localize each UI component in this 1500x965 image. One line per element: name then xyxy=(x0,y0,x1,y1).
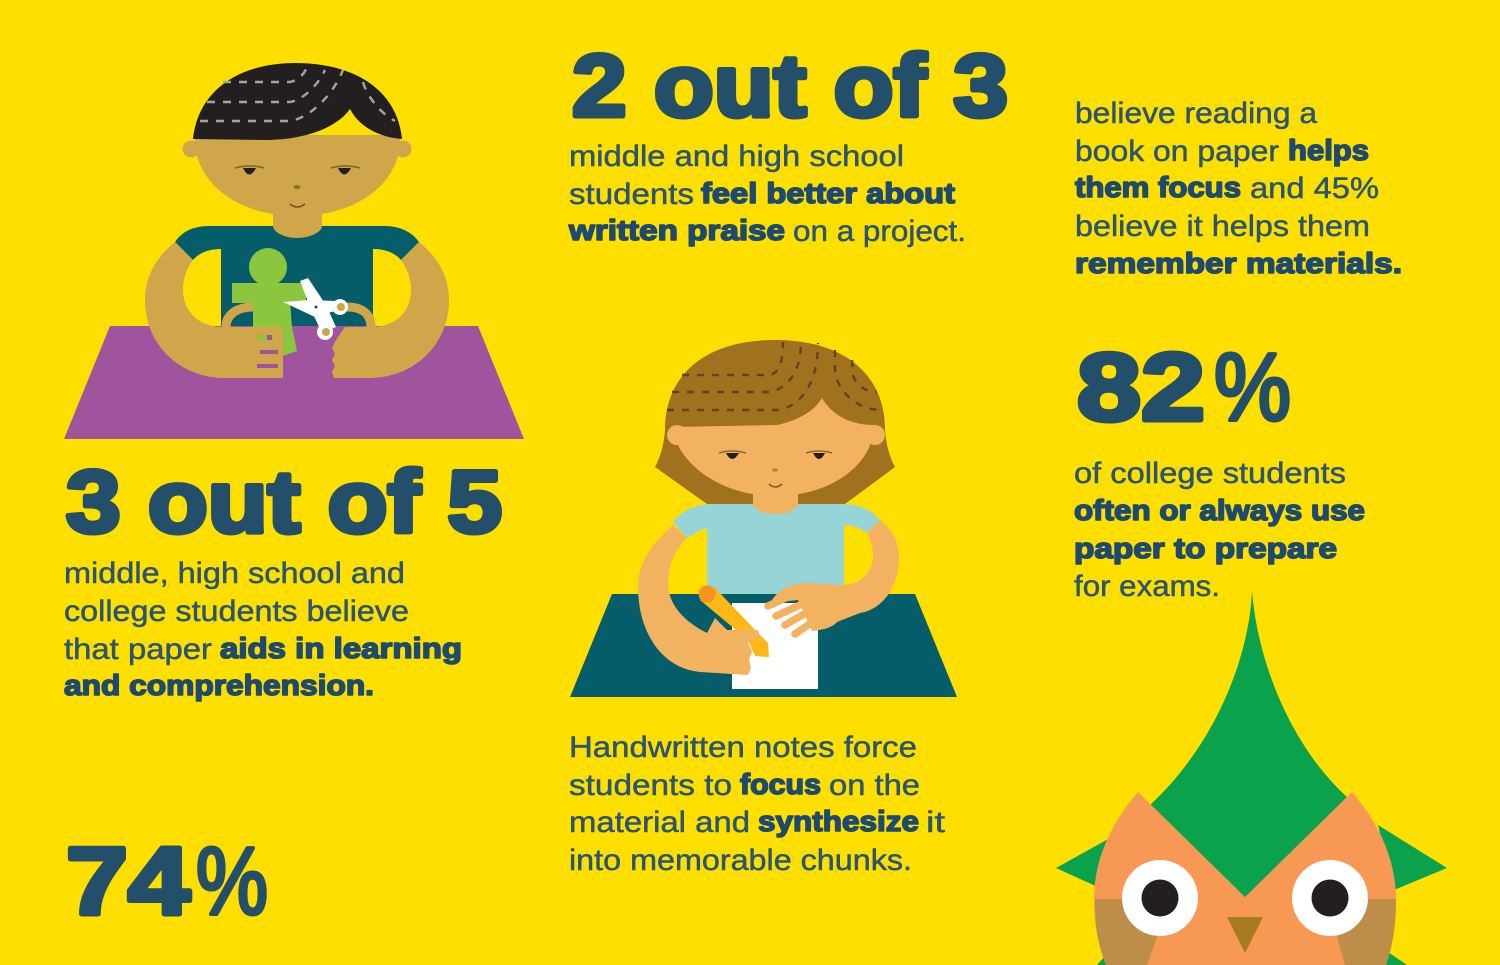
illustration: boy cutting paper xyxy=(64,63,524,439)
statistic: 74%: % xyxy=(196,828,268,935)
hair stitches xyxy=(667,342,882,410)
table: purple xyxy=(64,326,524,439)
text block: paper aids learning xyxy=(64,557,462,702)
owl wings xyxy=(1056,825,1447,965)
text block: handwritten notes: it xyxy=(926,806,946,839)
girl arms and hands xyxy=(638,520,899,675)
text block: exam preparation xyxy=(1074,457,1365,603)
text block: handwritten notes: focus xyxy=(740,769,821,801)
girl head xyxy=(667,342,885,514)
icon: scissors xyxy=(283,278,348,340)
owl crest xyxy=(1150,590,1347,900)
text block: reading on paper: believe it helps them xyxy=(1075,210,1370,243)
text block: handwritten notes: students to xyxy=(569,769,732,802)
girl shirt xyxy=(673,504,880,600)
icon: pencil xyxy=(698,586,769,657)
text block: paper aids learning: and comprehension. xyxy=(64,670,374,702)
heading: 3 out of 5: 3 out of 5 xyxy=(66,452,502,551)
text block: paper aids learning: middle, high school and xyxy=(64,557,405,590)
owl beak xyxy=(1227,917,1263,953)
heading: 2 out of 3: 2 out of 3 xyxy=(572,36,1008,135)
boy head xyxy=(182,63,412,238)
text block: handwritten notes xyxy=(569,731,946,877)
statistic: 74%: 74 xyxy=(66,828,190,935)
text block: handwritten notes: synthesize xyxy=(758,806,919,838)
text block: handwritten notes: Handwritten notes force xyxy=(569,731,917,764)
text block: written praise: students xyxy=(569,178,694,211)
boy shirt xyxy=(175,226,419,330)
paper figure xyxy=(232,248,306,358)
text block: reading on paper: and 45% xyxy=(1250,172,1379,205)
text block: written praise xyxy=(568,140,966,248)
illustration: owl xyxy=(1056,590,1447,965)
text block: written praise: on a project. xyxy=(793,215,966,248)
statistic: 82%: 82 xyxy=(1077,334,1205,441)
text block: written praise: written praise xyxy=(568,215,785,247)
text block: exam preparation: for exams. xyxy=(1074,570,1220,603)
text block: exam preparation: often or always use xyxy=(1074,495,1365,527)
girl hair xyxy=(655,340,895,504)
text block: handwritten notes: into memorable chunks. xyxy=(569,844,912,877)
statistic: 74% xyxy=(66,828,268,935)
owl cheeks xyxy=(1095,899,1396,965)
text block: handwritten notes: on the xyxy=(829,769,920,802)
text block: written praise: feel better about xyxy=(701,178,955,210)
text block: reading on paper: believe reading a xyxy=(1075,97,1317,130)
text block: reading on paper: them focus xyxy=(1075,172,1241,204)
text block: paper aids learning: that paper xyxy=(64,633,212,666)
statistic: 82%: % xyxy=(1214,334,1291,441)
text block: written praise: middle and high school xyxy=(569,140,904,173)
text block: exam preparation: of college students xyxy=(1074,457,1346,490)
statistic: 82% xyxy=(1077,334,1291,441)
boy hair xyxy=(193,63,402,140)
text block: reading on paper: book on paper xyxy=(1075,135,1279,168)
boy arms and hands xyxy=(145,242,449,378)
paper sheet xyxy=(732,603,818,689)
text block: reading on paper: helps xyxy=(1288,135,1369,167)
text block: exam preparation: paper to prepare xyxy=(1074,533,1337,565)
text block: paper aids learning: aids in learning xyxy=(220,633,462,665)
text block: handwritten notes: material and xyxy=(569,806,750,839)
owl right eye xyxy=(1292,860,1368,936)
girl eyes xyxy=(719,451,832,453)
owl left eye xyxy=(1122,860,1198,936)
owl face xyxy=(1094,792,1396,965)
text block: reading on paper xyxy=(1075,97,1402,280)
boy eyes xyxy=(235,166,360,168)
text block: reading on paper: remember materials. xyxy=(1075,248,1402,280)
table: teal xyxy=(570,594,957,697)
illustration: girl writing xyxy=(570,340,957,697)
text block: paper aids learning: college students believe xyxy=(64,595,409,628)
